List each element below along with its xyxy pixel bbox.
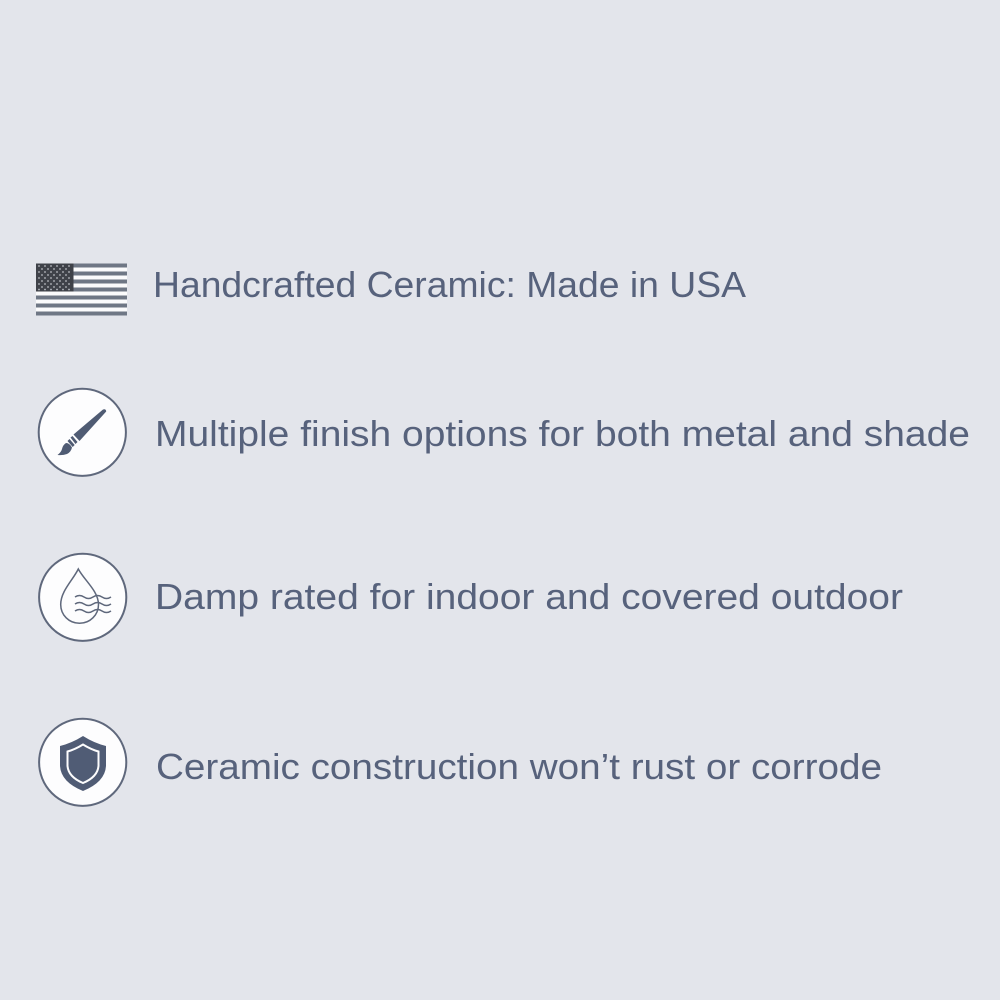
icon: water drop with waves [39, 554, 126, 641]
text: made in USA: Handcrafted Ceramic: Made in USA [153, 264, 747, 305]
icon: shield [39, 719, 126, 806]
text: damp rated: Damp rated for indoor and covered outdoor [155, 576, 903, 617]
icon: paint brush [39, 389, 126, 476]
icon: american flag [36, 264, 127, 316]
text: finish options: Multiple finish options for both metal and shade [155, 413, 970, 454]
text: ceramic construction: Ceramic construction won’t rust or corrode [156, 746, 882, 787]
